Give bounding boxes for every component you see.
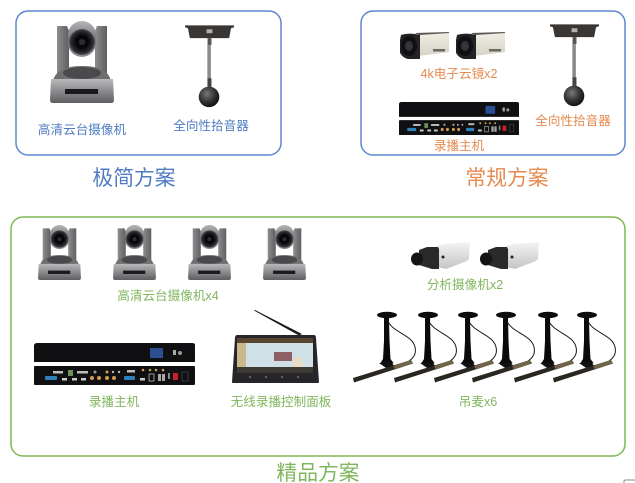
- icon: 4k camera 2: [456, 32, 505, 59]
- label: recorder: 录播主机: [434, 139, 485, 153]
- label: PTZ cameras: 高清云台摄像机x4: [117, 288, 219, 303]
- label: 4k camera: 4k电子云镜x2: [421, 67, 497, 81]
- label: PTZ camera: 高清云台摄像机: [38, 122, 126, 137]
- icon: PTZ camera 1: [38, 225, 81, 280]
- icon: analysis camera 1: [411, 242, 470, 269]
- label: hanging microphones: 吊麦x6: [459, 395, 497, 409]
- corner fragment: [624, 480, 635, 483]
- icon: wireless control tablet: [232, 310, 319, 383]
- icon: PTZ camera 4: [263, 225, 306, 280]
- icon: hanging microphones: [353, 312, 615, 382]
- icon: PTZ camera: [50, 21, 114, 103]
- label: recorder: 录播主机: [89, 395, 140, 409]
- label: tablet: 无线录播控制面板: [231, 395, 332, 409]
- icon: omnidirectional microphone: [185, 25, 234, 107]
- heading: 常规方案: 常规方案: [465, 167, 549, 190]
- label: microphone: 全向性拾音器: [535, 113, 611, 128]
- panel: 精品方案: [11, 217, 625, 456]
- icon: recorder: [34, 343, 195, 385]
- panel: 极简方案: [16, 11, 281, 155]
- label: analysis cameras: 分析摄像机x2: [427, 278, 503, 292]
- icon: PTZ camera 3: [188, 225, 231, 280]
- icon: 4k camera 1: [400, 32, 449, 59]
- icon: analysis camera 2: [480, 242, 539, 269]
- icon: recorder: [399, 102, 519, 135]
- heading: 极简方案: 极简方案: [92, 167, 176, 190]
- icon: omnidirectional microphone: [550, 24, 599, 106]
- panel: 常规方案: [361, 11, 625, 155]
- label: microphone: 全向性拾音器: [173, 118, 249, 133]
- icon: PTZ camera 2: [113, 225, 156, 280]
